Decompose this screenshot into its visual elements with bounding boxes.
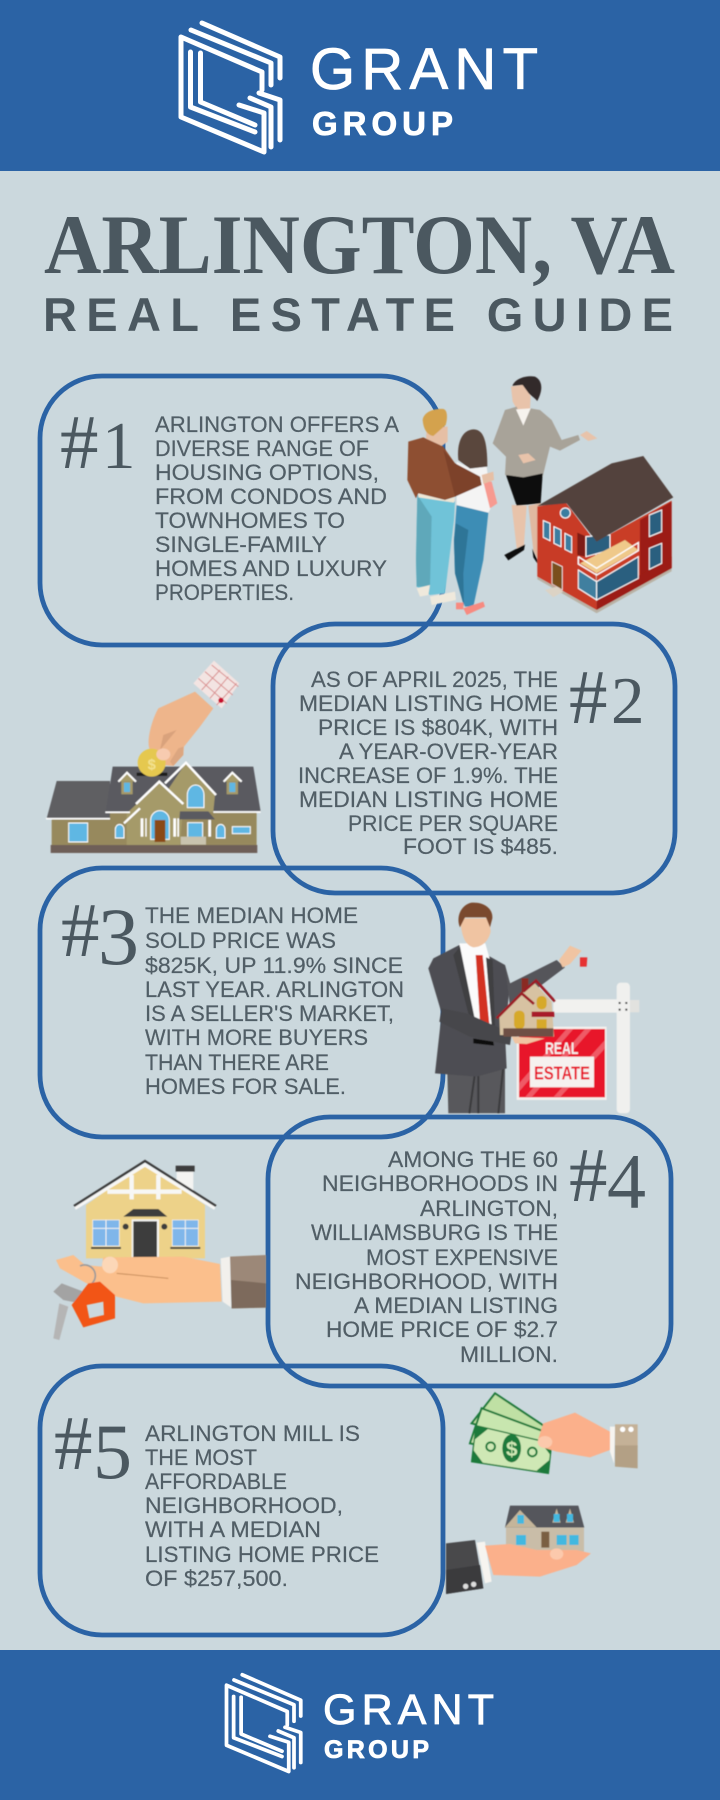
text block: fact 3: HOMES FOR SALE. xyxy=(145,1074,346,1099)
text block: fact 5 xyxy=(145,1421,379,1591)
text block: fact 3: THE MEDIAN HOME xyxy=(145,903,358,928)
number 2: 2 xyxy=(611,664,644,738)
banknotes: $ xyxy=(506,1438,518,1461)
text block: fact 1: ARLINGTON OFFERS A xyxy=(155,412,399,437)
text block: fact 3: WITH MORE BUYERS xyxy=(145,1025,368,1050)
number 1 xyxy=(60,399,136,485)
number 5 xyxy=(54,1400,132,1495)
number 3 xyxy=(61,887,139,982)
text block: fact 3: LAST YEAR. ARLINGTON xyxy=(145,977,404,1002)
red house xyxy=(537,456,673,613)
panel: fact 2 xyxy=(273,624,675,893)
text block: fact 3 xyxy=(145,903,404,1099)
text block: fact 1: SINGLE-FAMILY xyxy=(155,532,327,557)
mini house on hand xyxy=(497,978,555,1044)
banknotes xyxy=(470,1393,555,1473)
number 1: # xyxy=(60,399,98,485)
text block: fact 3: SOLD PRICE WAS xyxy=(145,928,336,953)
illustration: hands exchanging money and a house xyxy=(446,1393,638,1594)
number 3: # xyxy=(61,887,100,973)
lower hand with sleeve xyxy=(446,1540,591,1594)
text block: fact 1: DIVERSE RANGE OF xyxy=(155,436,369,461)
logo wordmark GROUP: GROUP xyxy=(312,105,453,142)
text block: fact 2: MEDIAN LISTING HOME xyxy=(299,787,558,812)
agent man xyxy=(428,903,587,1113)
illustration: couple with agent and red house xyxy=(407,376,673,615)
number 4: 4 xyxy=(607,1138,646,1225)
text block: fact 5: LISTING HOME PRICE xyxy=(145,1542,379,1567)
illustration: agent in suit with mini house and sign xyxy=(428,903,639,1113)
text block: fact 2: PRICE PER SQUARE xyxy=(348,811,558,836)
text block: fact 2: A YEAR-OVER-YEAR xyxy=(339,739,558,764)
panel: fact 1 xyxy=(40,376,443,645)
house xyxy=(46,763,261,853)
text block: fact 2: FOOT IS $485. xyxy=(403,834,558,859)
panel: fact 3 xyxy=(40,868,443,1137)
keys and orange keyring xyxy=(53,1265,115,1340)
number 4: # xyxy=(569,1132,608,1218)
hand and sleeve xyxy=(56,1255,266,1308)
coin xyxy=(137,749,167,777)
text block: fact 5: NEIGHBORHOOD, xyxy=(145,1493,343,1518)
text block: fact 4: MILLION. xyxy=(460,1342,558,1367)
text block: fact 4: NEIGHBORHOOD, WITH xyxy=(295,1269,558,1294)
text block: fact 2: INCREASE OF 1.9%. THE xyxy=(298,763,558,788)
text block: fact 1: PROPERTIES. xyxy=(155,580,294,605)
text block: fact 5: THE MOST xyxy=(145,1445,257,1470)
text block: fact 2 xyxy=(298,667,558,859)
footer wordmark GRANT: GRANT xyxy=(323,1686,494,1734)
text block: fact 2: MEDIAN LISTING HOME xyxy=(299,691,558,716)
text block: fact 5: AFFORDABLE xyxy=(145,1469,287,1494)
logo wordmark GRANT: GRANT xyxy=(310,37,538,102)
number 2: # xyxy=(569,654,608,740)
text block: fact 3: THAN THERE ARE xyxy=(145,1050,329,1075)
footer wordmark GROUP: GROUP xyxy=(324,1736,429,1764)
text block: fact 2: AS OF APRIL 2025, THE xyxy=(311,667,558,692)
text block: fact 4: AMONG THE 60 xyxy=(388,1147,558,1172)
text block: fact 4: ARLINGTON, xyxy=(420,1196,558,1221)
text block: fact 5: ARLINGTON MILL IS xyxy=(145,1421,360,1446)
coin: $ xyxy=(148,757,156,773)
small house xyxy=(505,1506,584,1552)
text block: fact 1: HOMES AND LUXURY xyxy=(155,556,387,581)
illustration: hand dropping coin into house xyxy=(46,661,261,853)
text block: fact 4: WILLIAMSBURG IS THE xyxy=(311,1220,558,1245)
icon: Grant Group logo mark small xyxy=(226,1675,301,1772)
thumb xyxy=(156,748,170,760)
icon: Grant Group logo mark xyxy=(181,23,280,152)
text block: fact 5: OF $257,500. xyxy=(145,1566,288,1591)
header banner with logo xyxy=(0,0,720,171)
number 5: 5 xyxy=(93,1408,132,1495)
text block: fact 4: NEIGHBORHOODS IN xyxy=(322,1171,558,1196)
number 3: 3 xyxy=(98,891,139,982)
cuff xyxy=(193,661,239,708)
text block: fact 1: TOWNHOMES TO xyxy=(155,508,345,533)
text block: fact 1 xyxy=(155,412,399,605)
title: ARLINGTON, VA xyxy=(44,198,675,292)
footer banner with logo xyxy=(0,1650,720,1800)
real estate sign post xyxy=(553,983,639,1113)
agent xyxy=(493,376,597,563)
text block: fact 2: PRICE IS $804K, WITH xyxy=(318,715,558,740)
panel: fact 4 xyxy=(268,1117,671,1386)
text block: fact 5: WITH A MEDIAN xyxy=(145,1517,321,1542)
number 1: 1 xyxy=(102,409,136,483)
number 2 xyxy=(569,654,644,740)
illustration: hand holding yellow house and keys xyxy=(53,1161,266,1340)
real estate sign board: ESTATE xyxy=(534,1062,590,1083)
yellow house xyxy=(74,1161,216,1258)
number 5: # xyxy=(54,1400,92,1486)
text block: fact 3: $825K, UP 11.9% SINCE xyxy=(145,953,403,978)
text block: fact 3: IS A SELLER'S MARKET, xyxy=(145,1001,394,1026)
text block: fact 1: HOUSING OPTIONS, xyxy=(155,460,379,485)
upper hand with sleeve xyxy=(538,1413,638,1468)
subtitle: REAL ESTATE GUIDE xyxy=(43,288,673,341)
hand xyxy=(149,692,213,766)
man xyxy=(407,409,494,605)
woman xyxy=(454,429,497,615)
number 4 xyxy=(569,1132,646,1225)
text block: fact 4 xyxy=(295,1147,558,1367)
text block: fact 1: FROM CONDOS AND xyxy=(155,484,387,509)
text block: fact 4: HOME PRICE OF $2.7 xyxy=(326,1317,558,1342)
real estate sign board xyxy=(517,1027,607,1100)
real estate sign board: REAL xyxy=(545,1039,578,1058)
text block: fact 4: MOST EXPENSIVE xyxy=(366,1245,558,1270)
panel: fact 5 xyxy=(40,1366,443,1635)
text block: fact 4: A MEDIAN LISTING xyxy=(354,1293,558,1318)
